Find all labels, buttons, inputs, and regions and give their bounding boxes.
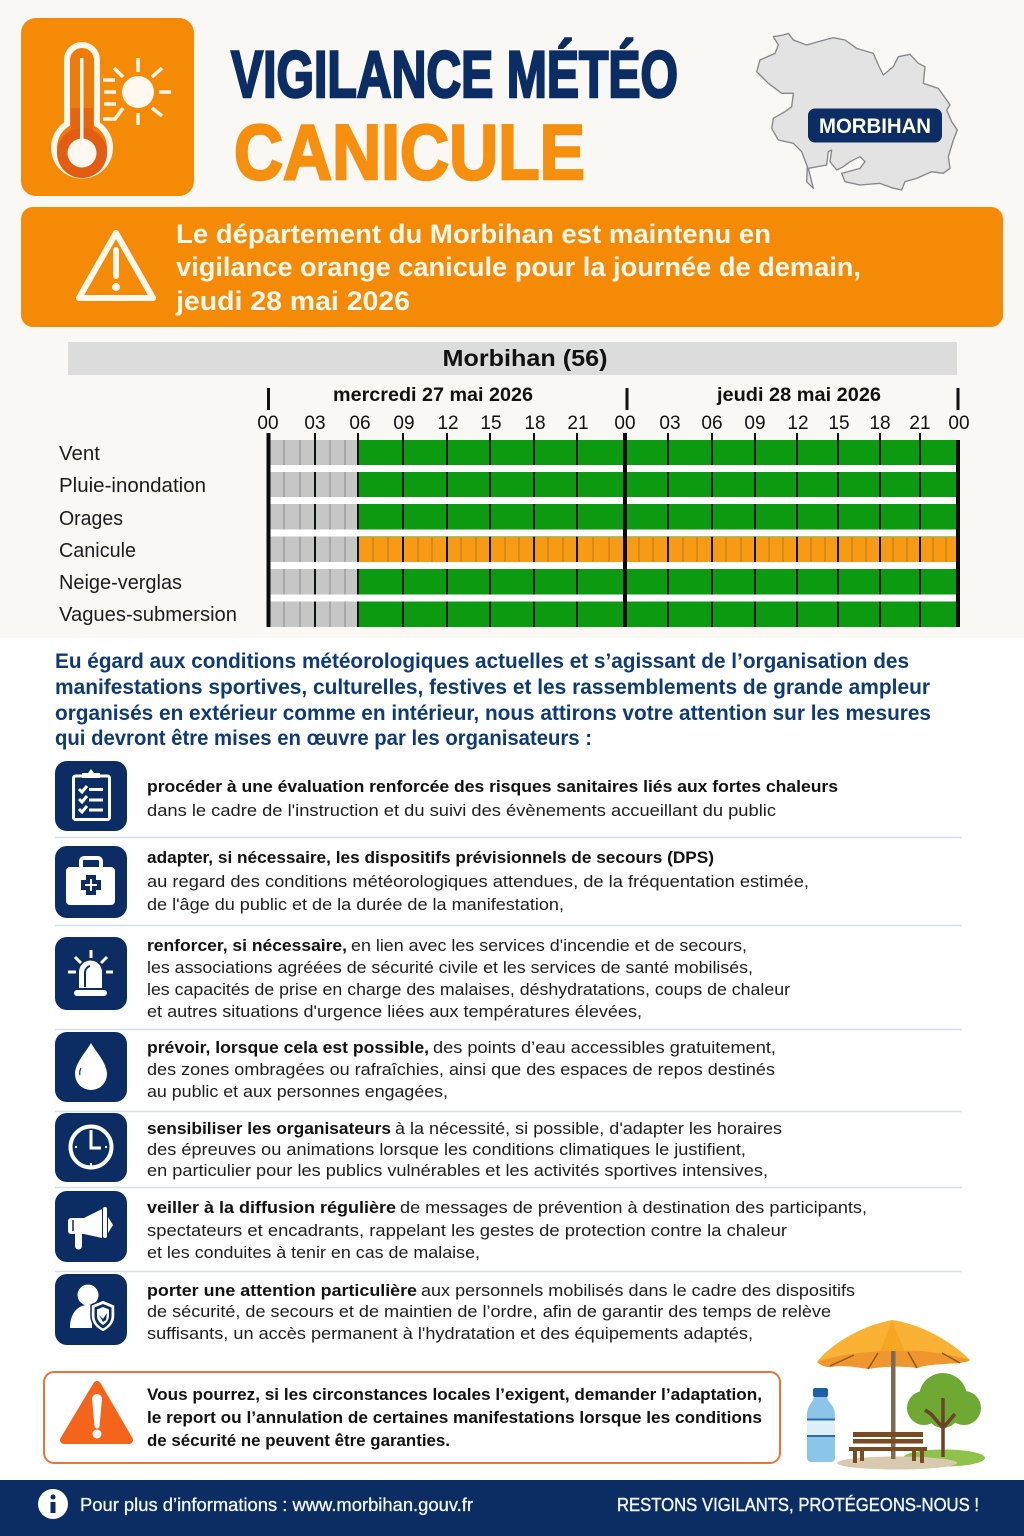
intro paragraph: manifestations sportives, culturelles, festives et les rassemblements de grande ampleur bbox=[55, 676, 930, 699]
measure 3: emergency services: en lien avec les services d'incendie et de secours, bbox=[351, 936, 747, 955]
alert banner: jeudi 28 mai 2026 bbox=[175, 286, 410, 316]
icon: checklist clipboard bbox=[55, 761, 127, 831]
measure 2: first aid: de l'âge du public et de la durée de la manifestation, bbox=[147, 895, 564, 914]
callout: adaptation or cancellation bbox=[44, 1372, 780, 1463]
measure 3: emergency services: les capacités de prise en charge des malaises, déshydratations, coups de chaleur bbox=[147, 980, 790, 999]
icon: warning triangle bbox=[64, 1385, 129, 1440]
icon: water drop bbox=[55, 1032, 127, 1102]
measure 2: first aid bbox=[55, 846, 809, 918]
hour labels: 09 bbox=[744, 413, 766, 434]
chart heading bbox=[68, 342, 957, 375]
measure 2: first aid: adapter, si nécessaire, les dispositifs prévisionnels de secours (DPS) bbox=[147, 848, 714, 867]
hazard row labels: Neige-verglas bbox=[59, 572, 182, 594]
hazard row labels: Vagues-submersion bbox=[59, 604, 237, 626]
title: VIGILANCE MÉTÉO bbox=[231, 37, 678, 111]
measure 7: mobilised staff bbox=[55, 1274, 855, 1345]
icon: warning triangle bbox=[79, 233, 153, 298]
hour labels: 15 bbox=[828, 413, 850, 434]
intro paragraph: Eu égard aux conditions météorologiques actuelles et s’agissant de l’organisation des bbox=[55, 650, 909, 673]
measure 5: schedules: en particulier pour les publics vulnérables et les activités sportives intensives, bbox=[147, 1161, 768, 1180]
hour labels: 09 bbox=[393, 413, 415, 434]
measure 1: risk evaluation: dans le cadre de l'instruction et du suivi des évènements accueillant du public bbox=[147, 801, 777, 820]
callout: adaptation or cancellation: de sécurité ne peuvent être garanties. bbox=[147, 1431, 450, 1450]
icon: clock bbox=[55, 1113, 127, 1182]
measure 7: mobilised staff: de sécurité, de secours et de maintien de l’ordre, afin de garantir des temps de relève bbox=[147, 1302, 831, 1321]
illustration: parasol, bench, bottle and tree bbox=[807, 1320, 985, 1470]
hazard row labels: Vent bbox=[59, 443, 100, 465]
hour labels: 03 bbox=[304, 413, 326, 434]
measure 6: prevention messages: spectateurs et encadrants, rappelant les gestes de protection contre la chaleur bbox=[147, 1221, 787, 1240]
measure 6: prevention messages bbox=[55, 1191, 867, 1262]
measure 2: first aid: au regard des conditions météorologiques attendues, de la fréquentation estimée, bbox=[147, 872, 809, 891]
hour labels: 03 bbox=[659, 413, 681, 434]
tree bbox=[907, 1373, 981, 1457]
bench bbox=[849, 1432, 927, 1463]
hour labels: 12 bbox=[787, 413, 809, 434]
callout: adaptation or cancellation: Vous pourrez, si les circonstances locales l’exigent, demander l’adaptation, bbox=[147, 1385, 762, 1404]
measure 6: prevention messages: veiller à la diffusion régulière bbox=[147, 1198, 396, 1217]
measure 5: schedules: des épreuves ou animations lorsque les conditions climatiques le justifient, bbox=[147, 1140, 746, 1159]
measure 4: water and shade: au public et aux personnes engagées, bbox=[147, 1082, 448, 1101]
alert banner: vigilance orange canicule pour la journée de demain, bbox=[176, 252, 861, 282]
measure 6: prevention messages: et les conduites à tenir en cas de malaise, bbox=[147, 1243, 480, 1262]
measure 4: water and shade: prévoir, lorsque cela est possible, bbox=[147, 1038, 429, 1057]
measure 5: schedules: sensibiliser les organisateurs bbox=[147, 1119, 391, 1138]
water bottle bbox=[807, 1388, 835, 1462]
hour labels: 00 bbox=[257, 413, 279, 434]
measure 3: emergency services: renforcer, si nécessaire, bbox=[147, 936, 347, 955]
hour labels: 06 bbox=[701, 413, 723, 434]
footer: RESTONS VIGILANTS, PROTÉGEONS-NOUS ! bbox=[617, 1495, 979, 1515]
hour labels: 15 bbox=[480, 413, 502, 434]
intro paragraph bbox=[55, 650, 931, 750]
measure 4: water and shade: des zones ombragées ou rafraîchies, ainsi que des espaces de repos destinés bbox=[147, 1060, 775, 1079]
callout: adaptation or cancellation: le report ou l’annulation de certaines manifestations lorsque les conditions bbox=[147, 1408, 762, 1427]
hazard row labels: Orages bbox=[59, 508, 123, 530]
bars bbox=[268, 433, 958, 627]
hour labels bbox=[257, 413, 970, 434]
alert banner: Le département du Morbihan est maintenu en bbox=[176, 219, 771, 249]
measure 4: water and shade: des points d’eau accessibles gratuitement, bbox=[433, 1038, 776, 1057]
hour labels: 00 bbox=[948, 413, 970, 434]
hour labels: 18 bbox=[524, 413, 546, 434]
measure 1: risk evaluation bbox=[55, 761, 838, 831]
hour labels: 18 bbox=[869, 413, 891, 434]
alert banner bbox=[21, 207, 1003, 327]
chart heading: Morbihan (56) bbox=[442, 345, 608, 371]
intro paragraph: organisés en extérieur comme en intérieur, nous attirons votre attention sur les mesures bbox=[55, 702, 931, 725]
footer: Pour plus d’informations : www.morbihan.gouv.fr bbox=[80, 1495, 473, 1515]
icon: information bbox=[38, 1489, 68, 1519]
hour labels: 21 bbox=[909, 413, 931, 434]
icon: emergency beacon bbox=[55, 937, 127, 1010]
measure 4: water and shade bbox=[55, 1032, 776, 1102]
title: CANICULE bbox=[234, 108, 585, 196]
measure 7: mobilised staff: porter une attention particulière bbox=[147, 1281, 417, 1300]
measure 7: mobilised staff: suffisants, un accès permanent à l'hydratation et des équipements adaptés, bbox=[147, 1324, 753, 1343]
icon: thermometer and sun bbox=[21, 18, 194, 196]
chart: vigilance timeline bbox=[59, 385, 970, 627]
hour labels: 06 bbox=[349, 413, 371, 434]
hazard row labels: Canicule bbox=[59, 540, 136, 562]
icon: first aid kit bbox=[55, 846, 127, 918]
measure 3: emergency services: les associations agréées de sécurité civile et les services de santé mobilisés, bbox=[147, 958, 753, 977]
measure 5: schedules: à la nécessité, si possible, d'adapter les horaires bbox=[395, 1119, 782, 1138]
title bbox=[231, 37, 678, 196]
day labels: jeudi 28 mai 2026 bbox=[716, 385, 881, 406]
measure 7: mobilised staff: aux personnels mobilisés dans le cadre des dispositifs bbox=[421, 1281, 855, 1300]
measure 5: schedules bbox=[55, 1113, 782, 1182]
icon: megaphone bbox=[55, 1191, 127, 1262]
hazard row labels: Pluie-inondation bbox=[59, 475, 206, 497]
measure 3: emergency services bbox=[55, 936, 790, 1021]
hour labels: 00 bbox=[614, 413, 636, 434]
measure 6: prevention messages: de messages de prévention à destination des participants, bbox=[400, 1198, 867, 1217]
measure 3: emergency services: et autres situations d'urgence liées aux températures élevées, bbox=[147, 1002, 642, 1021]
measure 1: risk evaluation: procéder à une évaluation renforcée des risques sanitaires liés aux fortes chaleurs bbox=[147, 777, 838, 796]
intro paragraph: qui devront être mises en œuvre par les organisateurs : bbox=[55, 727, 592, 750]
hour labels: 21 bbox=[567, 413, 589, 434]
hazard row labels bbox=[59, 443, 237, 626]
icon: person with shield bbox=[55, 1274, 127, 1345]
hour labels: 12 bbox=[437, 413, 459, 434]
day labels bbox=[268, 385, 958, 410]
day labels: mercredi 27 mai 2026 bbox=[333, 385, 533, 406]
parasol bbox=[817, 1320, 970, 1459]
map: Morbihan with label bbox=[757, 33, 957, 190]
map: Morbihan with label: MORBIHAN bbox=[819, 114, 931, 138]
footer bbox=[0, 1480, 1024, 1536]
